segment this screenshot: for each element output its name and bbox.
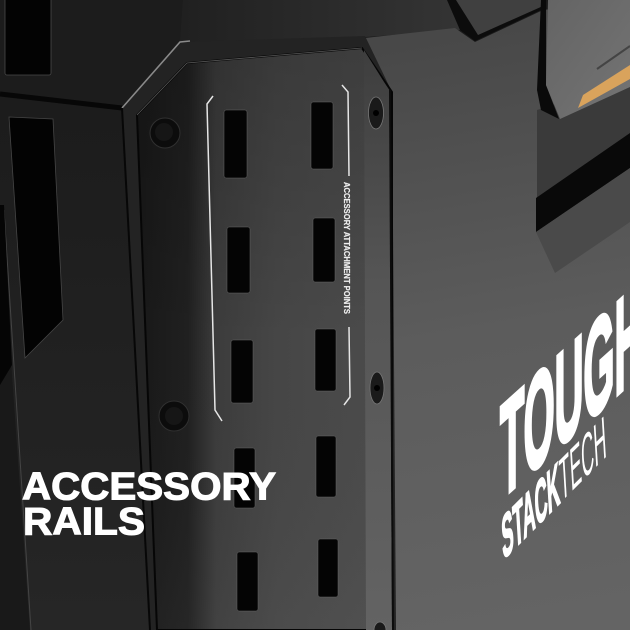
orange strip — [578, 65, 630, 108]
rail side strip — [364, 50, 392, 630]
left bracket line — [207, 96, 222, 421]
screw top left — [150, 118, 180, 148]
logo: stacktech wordmark: STACKTECH — [500, 402, 608, 573]
screw side middle — [370, 372, 384, 404]
title: RAILS — [23, 500, 145, 544]
rail outer frame — [122, 36, 396, 630]
right bracket lower line — [344, 327, 350, 405]
screw side bottom — [374, 622, 386, 630]
label: accessory attachment points: ACCESSORY ATTACHMENT POINTS — [342, 182, 351, 315]
top lid band — [180, 0, 460, 42]
latch with orange strip — [537, 0, 630, 119]
screw bottom left — [159, 401, 189, 431]
title: ACCESSORY — [22, 466, 276, 508]
right bracket upper line — [342, 85, 349, 176]
screw side top — [368, 97, 384, 129]
accessory rail panel — [137, 48, 392, 630]
right case body — [365, 0, 630, 630]
attachment slots, right column — [311, 102, 338, 597]
lower handle recess — [536, 80, 630, 273]
attachment slots, left column — [224, 110, 258, 611]
logo — [500, 149, 630, 573]
left slot top — [5, 0, 51, 75]
title — [22, 466, 276, 544]
left edge opening — [0, 205, 12, 385]
left slot large — [9, 117, 63, 358]
top handle piece — [447, 0, 545, 41]
